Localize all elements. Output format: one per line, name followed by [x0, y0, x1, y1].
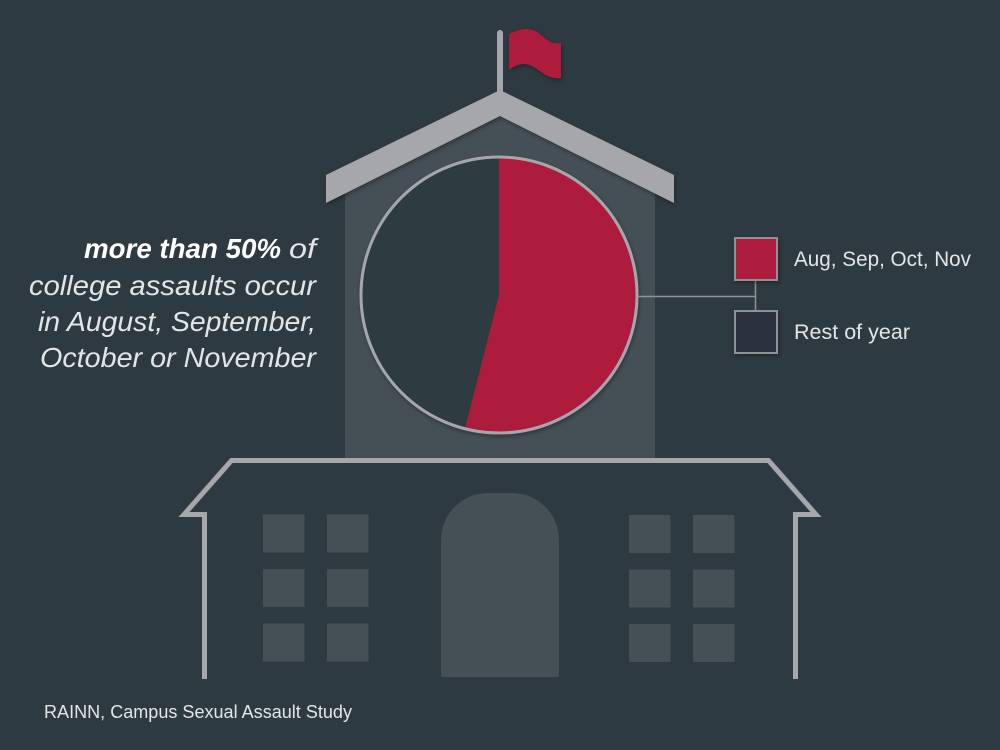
- headline text: [29, 233, 320, 373]
- door: [441, 493, 559, 677]
- main building outline: [184, 460, 816, 679]
- legend swatch: Aug, Sep, Oct, Nov: [735, 238, 777, 280]
- source note: RAINN, Campus Sexual Assault Study: [44, 702, 352, 722]
- legend label: Rest of year: Rest of year: [794, 321, 910, 344]
- windows: left: [263, 514, 368, 662]
- legend swatch: Rest of year: [735, 311, 777, 353]
- headline text: more than 50%: [84, 233, 281, 264]
- legend connector: [638, 281, 756, 310]
- roof: [326, 90, 674, 203]
- tower: [345, 116, 655, 460]
- headline text: in August, September,: [38, 306, 316, 337]
- headline text: college assaults occur: [29, 270, 318, 301]
- pie chart: [361, 157, 637, 433]
- headline text: October or November: [40, 342, 318, 373]
- headline text: of: [289, 233, 320, 264]
- legend label: Aug, Sep, Oct, Nov: Aug, Sep, Oct, Nov: [794, 248, 971, 271]
- icon: flag: [509, 29, 561, 78]
- windows: right: [629, 515, 734, 662]
- flagpole: [497, 30, 503, 94]
